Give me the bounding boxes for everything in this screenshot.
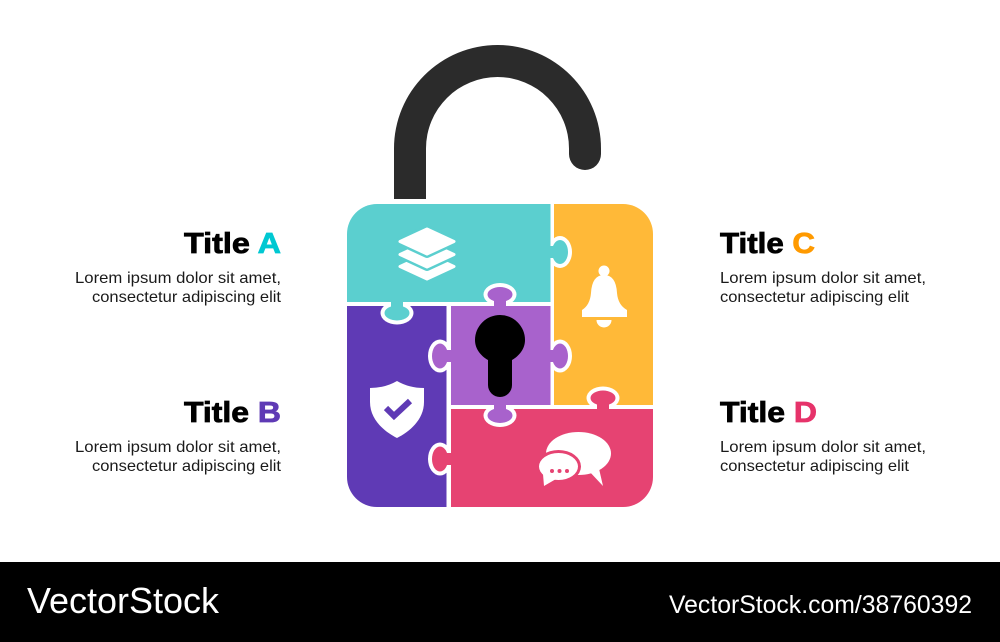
text block: Title C: Lorem ipsum dolor sit amet, xyxy=(720,270,926,287)
icon: speech bubbles xyxy=(536,432,611,486)
icon: shield with check xyxy=(370,381,424,438)
text block: Title C xyxy=(720,228,926,306)
text block: Title B: Lorem ipsum dolor sit amet, xyxy=(75,439,281,456)
icon: bell xyxy=(582,266,627,328)
piece B: dark purple xyxy=(347,306,446,507)
text block: Title A: Title A xyxy=(184,228,281,260)
keyhole xyxy=(475,315,525,397)
text block: Title D: Title D xyxy=(720,397,817,429)
puzzle lock body xyxy=(347,204,653,507)
text block: Title B xyxy=(75,397,282,475)
icon: layers xyxy=(400,229,454,279)
piece C: orange xyxy=(554,204,653,405)
text block: Title B: consectetur adipiscing elit xyxy=(92,458,282,475)
piece D: pink with tabs xyxy=(428,386,653,507)
footer brand: VectorStock xyxy=(27,580,220,621)
piece E: violet with tabs xyxy=(428,283,572,427)
text block: Title A: Lorem ipsum dolor sit amet, xyxy=(75,270,281,287)
text block: Title D: consectetur adipiscing elit xyxy=(720,458,910,475)
text block: Title C: Title C xyxy=(720,228,815,260)
text block: Title A xyxy=(75,228,282,306)
footer image id: VectorStock.com/38760392 xyxy=(669,591,972,619)
text block: Title A: consectetur adipiscing elit xyxy=(92,289,282,306)
footer bar xyxy=(0,562,1000,642)
piece A: teal with tabs xyxy=(347,204,572,324)
text block: Title D xyxy=(720,397,926,475)
lock shackle xyxy=(394,45,601,199)
text block: Title D: Lorem ipsum dolor sit amet, xyxy=(720,439,926,456)
text block: Title B: Title B xyxy=(184,397,281,429)
text block: Title C: consectetur adipiscing elit xyxy=(720,289,910,306)
